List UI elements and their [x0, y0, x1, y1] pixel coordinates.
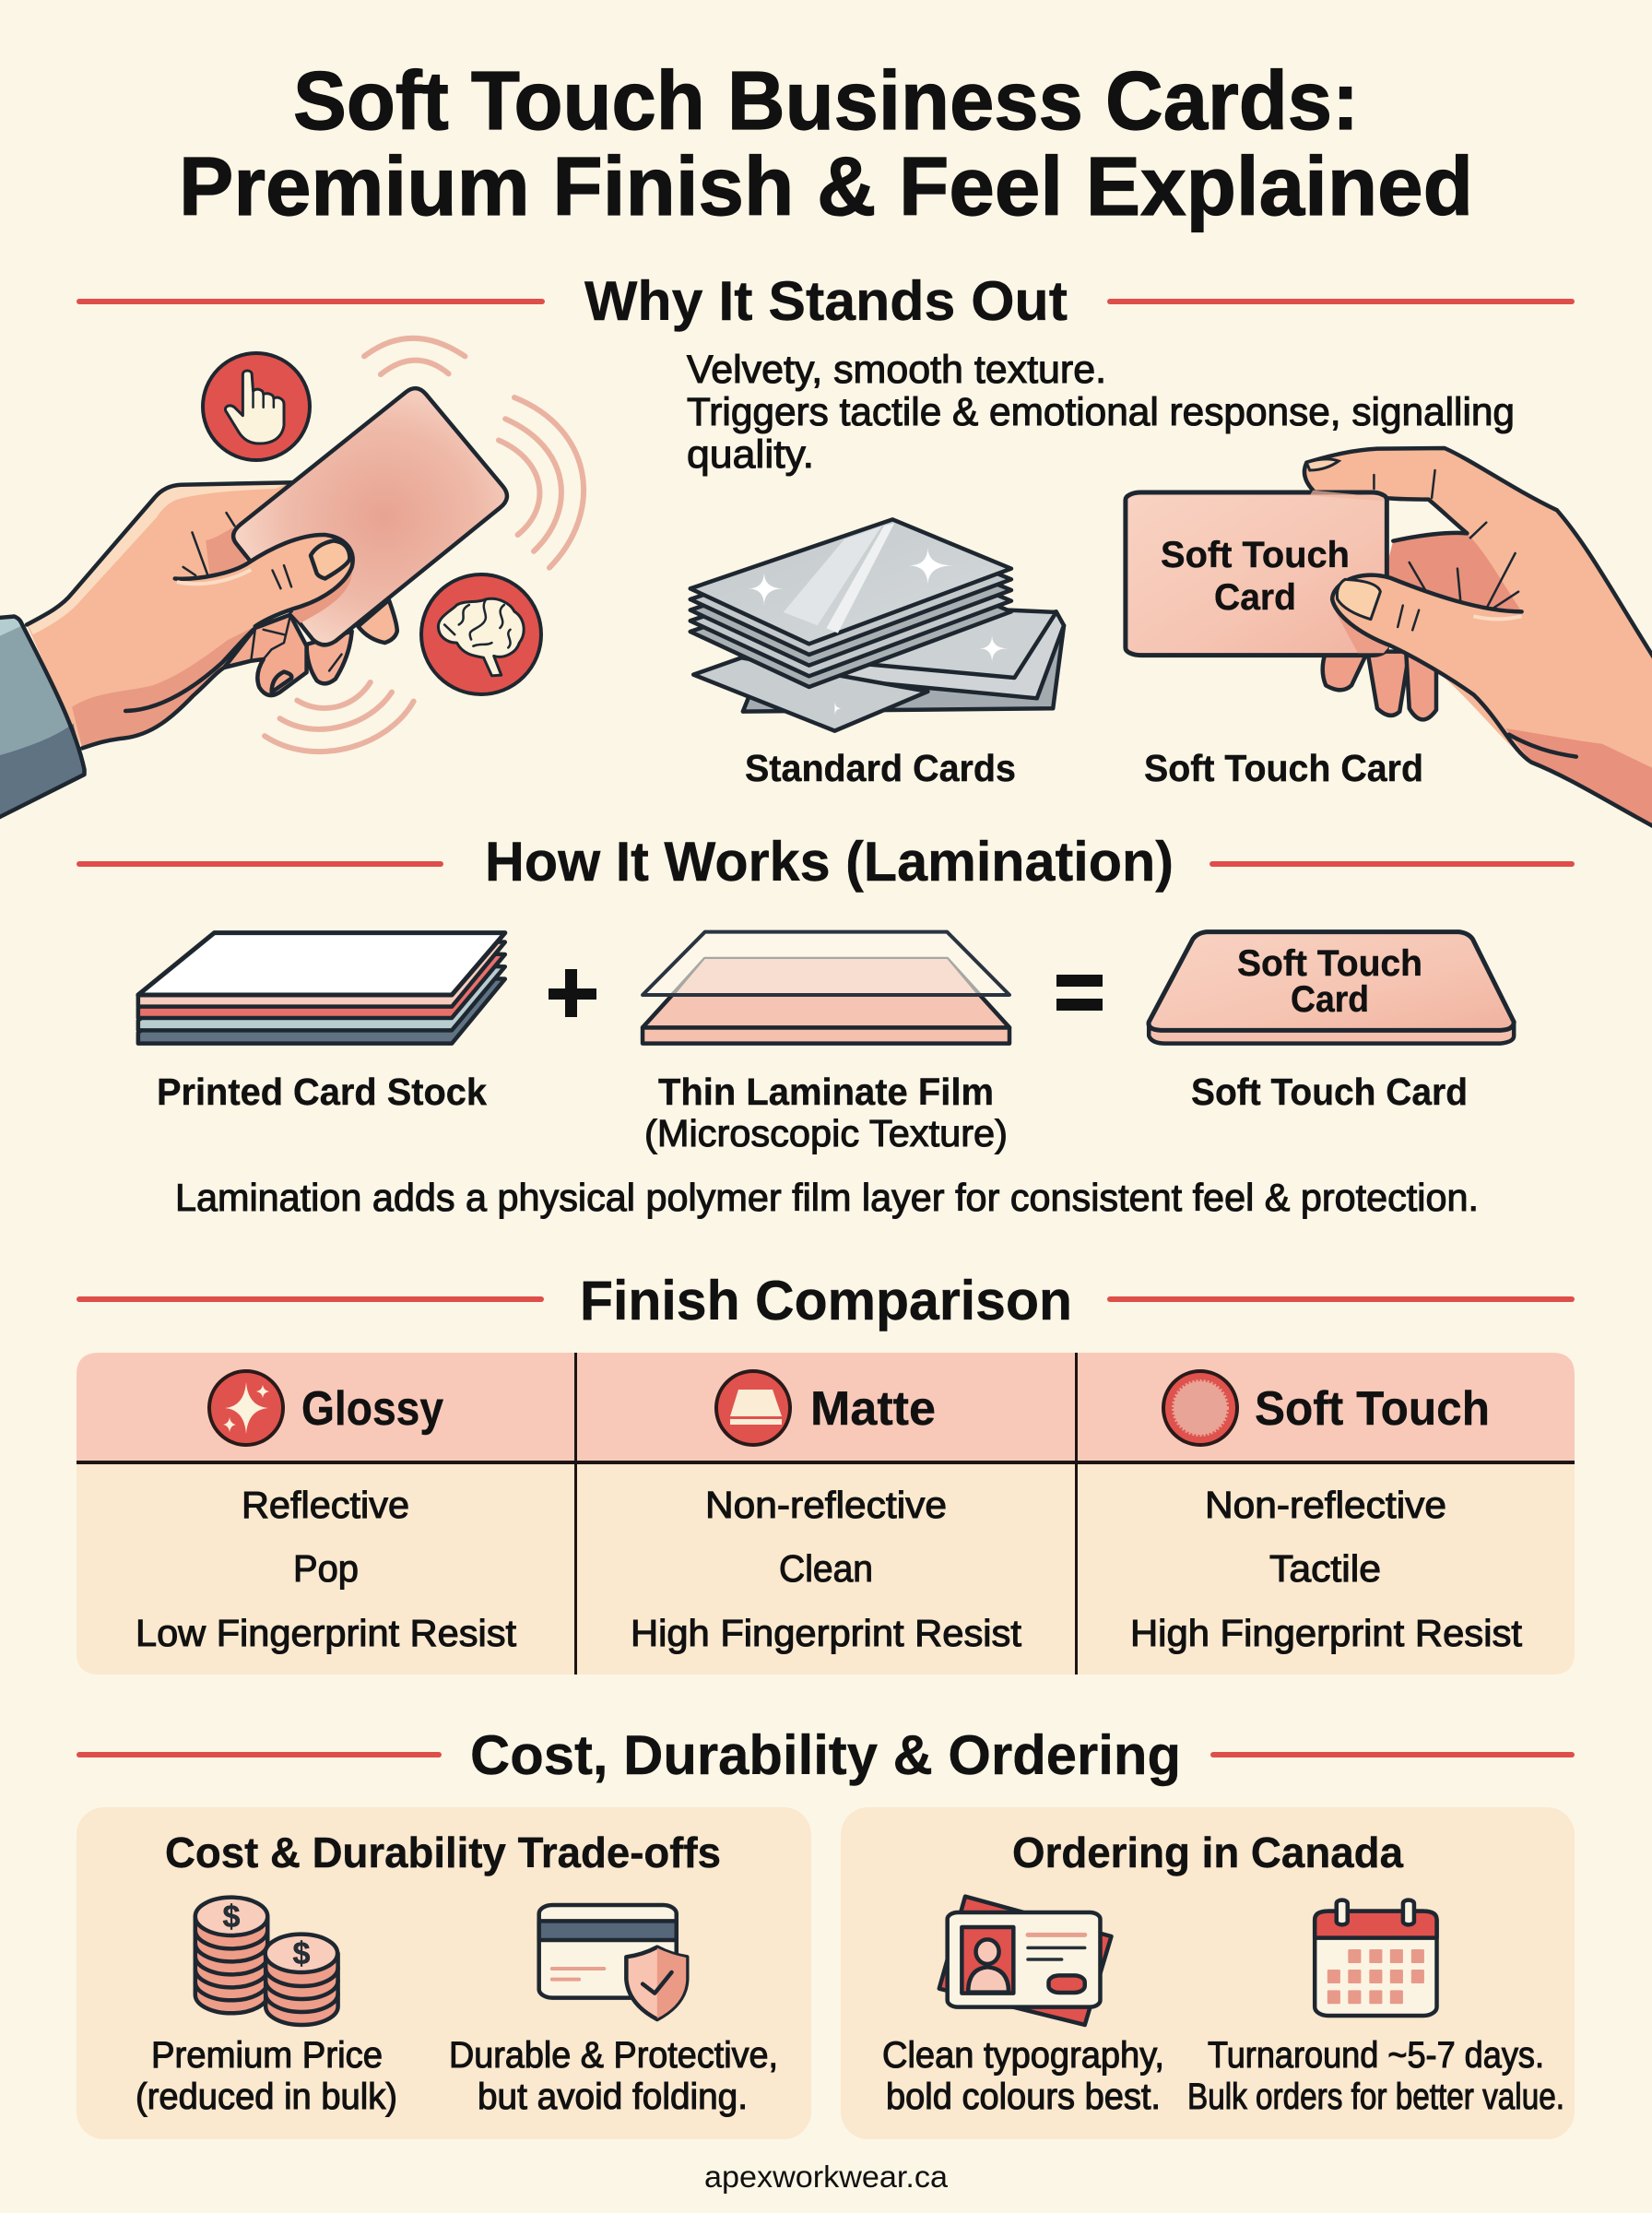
icon: coin stacks: $ — [223, 1899, 241, 1935]
icon: calendar — [1315, 1900, 1437, 2016]
text: lamination explanation: Lamination adds a physical polymer film layer for consistent feel & protection. — [175, 1176, 1479, 1219]
heading: Why It Stands Out — [77, 270, 1575, 332]
icon: pointer in circle — [203, 353, 310, 460]
title: Soft Touch Business Cards: — [293, 55, 1359, 148]
index finger tip overlap — [1310, 491, 1384, 501]
panel: cost and durability — [77, 1807, 811, 2139]
caption: premium price — [136, 2035, 397, 2117]
soft touch card — [233, 388, 507, 645]
text block: why it stands out: quality. — [687, 432, 814, 477]
illustration: hand holding soft touch card — [0, 338, 584, 819]
icon: card with shield — [539, 1905, 687, 2019]
caption: durable and protective — [449, 2035, 778, 2117]
back cards — [693, 610, 1064, 731]
table body background — [77, 1462, 1575, 1675]
caption: clean typography: bold colours best. — [886, 2077, 1161, 2117]
panel title: Cost & Durability Trade-offs — [165, 1828, 721, 1876]
heading: Why It Stands Out: Why It Stands Out — [584, 270, 1068, 332]
label: Soft Touch Card result: Soft Touch Card — [1191, 1071, 1468, 1113]
illustration: finished soft touch card — [1149, 932, 1514, 1044]
icon: equals — [1056, 975, 1103, 1011]
column: soft touch: Soft Touch — [1255, 1382, 1490, 1436]
footer: website: apexworkwear.ca — [704, 2160, 949, 2194]
table header background — [77, 1353, 1575, 1462]
stacked layers — [690, 530, 1011, 687]
icon: coin stacks: $ — [293, 1936, 311, 1971]
heading: Cost, Durability & Ordering: Cost, Durability & Ordering — [470, 1724, 1181, 1786]
illustration: hand holding labelled soft touch card — [1126, 448, 1652, 830]
column: soft touch: Non-reflective — [1205, 1484, 1446, 1526]
text on labelled card: Soft Touch — [1161, 535, 1350, 575]
panel title: Ordering in Canada — [1012, 1828, 1403, 1876]
hand back — [1304, 448, 1652, 830]
caption: clean typography — [882, 2035, 1164, 2117]
icon: plus — [549, 969, 596, 1017]
column: glossy: Glossy — [301, 1382, 443, 1436]
illustration: printed card stock layers — [138, 933, 505, 1044]
heading: Finish Comparison — [77, 1270, 1575, 1331]
thumb — [157, 535, 353, 643]
sleeve — [0, 617, 85, 819]
hand palm — [27, 482, 354, 748]
panel: ordering in canada — [841, 1807, 1575, 2139]
column: matte: Matte — [810, 1382, 936, 1436]
column: soft touch: High Fingerprint Resist — [1130, 1612, 1523, 1654]
heading: How It Works — [77, 831, 1575, 893]
label: Thin Laminate Film — [644, 1071, 1008, 1154]
text on finished card: Soft Touch — [1237, 943, 1422, 984]
caption: clean typography: Clean typography, — [882, 2035, 1164, 2076]
text on finished card: Card — [1291, 979, 1369, 1020]
icon: coin stacks — [195, 1898, 338, 2025]
column: matte — [631, 1371, 1022, 1654]
label: Soft Touch Card: Soft Touch Card — [1144, 747, 1423, 789]
sparkles on loose cards — [828, 634, 1008, 716]
heading: Cost, Durability & Ordering — [77, 1724, 1575, 1786]
column: matte: Non-reflective — [705, 1484, 947, 1526]
sound arcs — [265, 338, 584, 751]
caption: turnaround: Turnaround ~5-7 days. — [1208, 2035, 1544, 2076]
heading: How It Works: How It Works (Lamination) — [485, 831, 1174, 893]
panel: finish comparison table — [77, 1353, 1575, 1675]
illustration: laminate film over card — [643, 932, 1009, 1044]
fingers behind card — [224, 600, 397, 695]
label: Standard Cards: Standard Cards — [745, 747, 1016, 789]
caption: premium price: (reduced in bulk) — [136, 2077, 397, 2117]
text block: why it stands out: Triggers tactile & emotional response, signalling — [687, 390, 1515, 434]
labelled card — [1126, 492, 1386, 656]
caption: durable and protective: but avoid folding. — [478, 2077, 748, 2117]
text block: why it stands out: Velvety, smooth texture. — [687, 348, 1106, 392]
heading: Finish Comparison: Finish Comparison — [580, 1270, 1072, 1331]
column: glossy: Low Fingerprint Resist — [136, 1612, 517, 1654]
illustration: standard glossy card stack — [690, 519, 1064, 731]
text on labelled card — [1161, 535, 1350, 618]
column: soft touch — [1130, 1371, 1523, 1654]
column: soft touch: Tactile — [1269, 1547, 1381, 1590]
lower fingers — [1323, 652, 1436, 719]
caption: durable and protective: Durable & Protective, — [449, 2035, 778, 2076]
column: matte: High Fingerprint Resist — [631, 1612, 1022, 1654]
column: glossy: Reflective — [242, 1484, 409, 1526]
thumb — [1332, 575, 1652, 830]
title — [179, 55, 1473, 233]
text on finished card — [1237, 943, 1422, 1020]
column: matte: Clean — [779, 1547, 873, 1590]
label: Thin Laminate Film: (Microscopic Texture) — [644, 1112, 1008, 1154]
label: Thin Laminate Film: Thin Laminate Film — [658, 1071, 994, 1113]
label: Printed Card Stock: Printed Card Stock — [157, 1071, 487, 1113]
text on labelled card: Card — [1214, 577, 1296, 618]
icon: business cards — [939, 1897, 1111, 2025]
text block: why it stands out — [687, 348, 1515, 477]
top glossy card — [690, 519, 1011, 644]
caption: premium price: Premium Price — [151, 2035, 383, 2076]
caption: turnaround — [1187, 2035, 1564, 2117]
icon: brain in circle — [421, 574, 541, 694]
caption: turnaround: Bulk orders for better value. — [1187, 2077, 1564, 2117]
column: glossy: Pop — [293, 1547, 359, 1590]
title: Premium Finish & Feel Explained — [179, 141, 1473, 233]
column: glossy — [136, 1371, 517, 1654]
